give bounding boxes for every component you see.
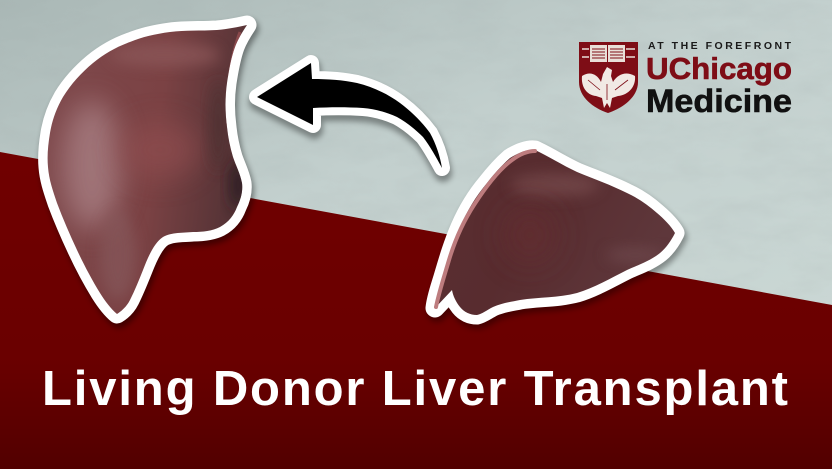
logo tagline: AT THE FOREFRONT (648, 40, 792, 52)
liver: small donor liver segment (435, 150, 677, 319)
background: red diagonal lower area (0, 152, 832, 469)
icon: crest shield with book and phoenix (579, 42, 638, 113)
logo wordmark: Medicine: Medicine (646, 83, 792, 119)
title: Living Donor Liver Transplant (42, 362, 788, 416)
edge highlight along the left of the small liver (436, 151, 535, 307)
liver: large recipient liver (48, 25, 249, 318)
arrow: curved black arrow from small liver to large liver (257, 63, 443, 173)
logo: UChicago Medicine (579, 40, 792, 119)
logo wordmark: UChicago: UChicago (646, 51, 792, 86)
